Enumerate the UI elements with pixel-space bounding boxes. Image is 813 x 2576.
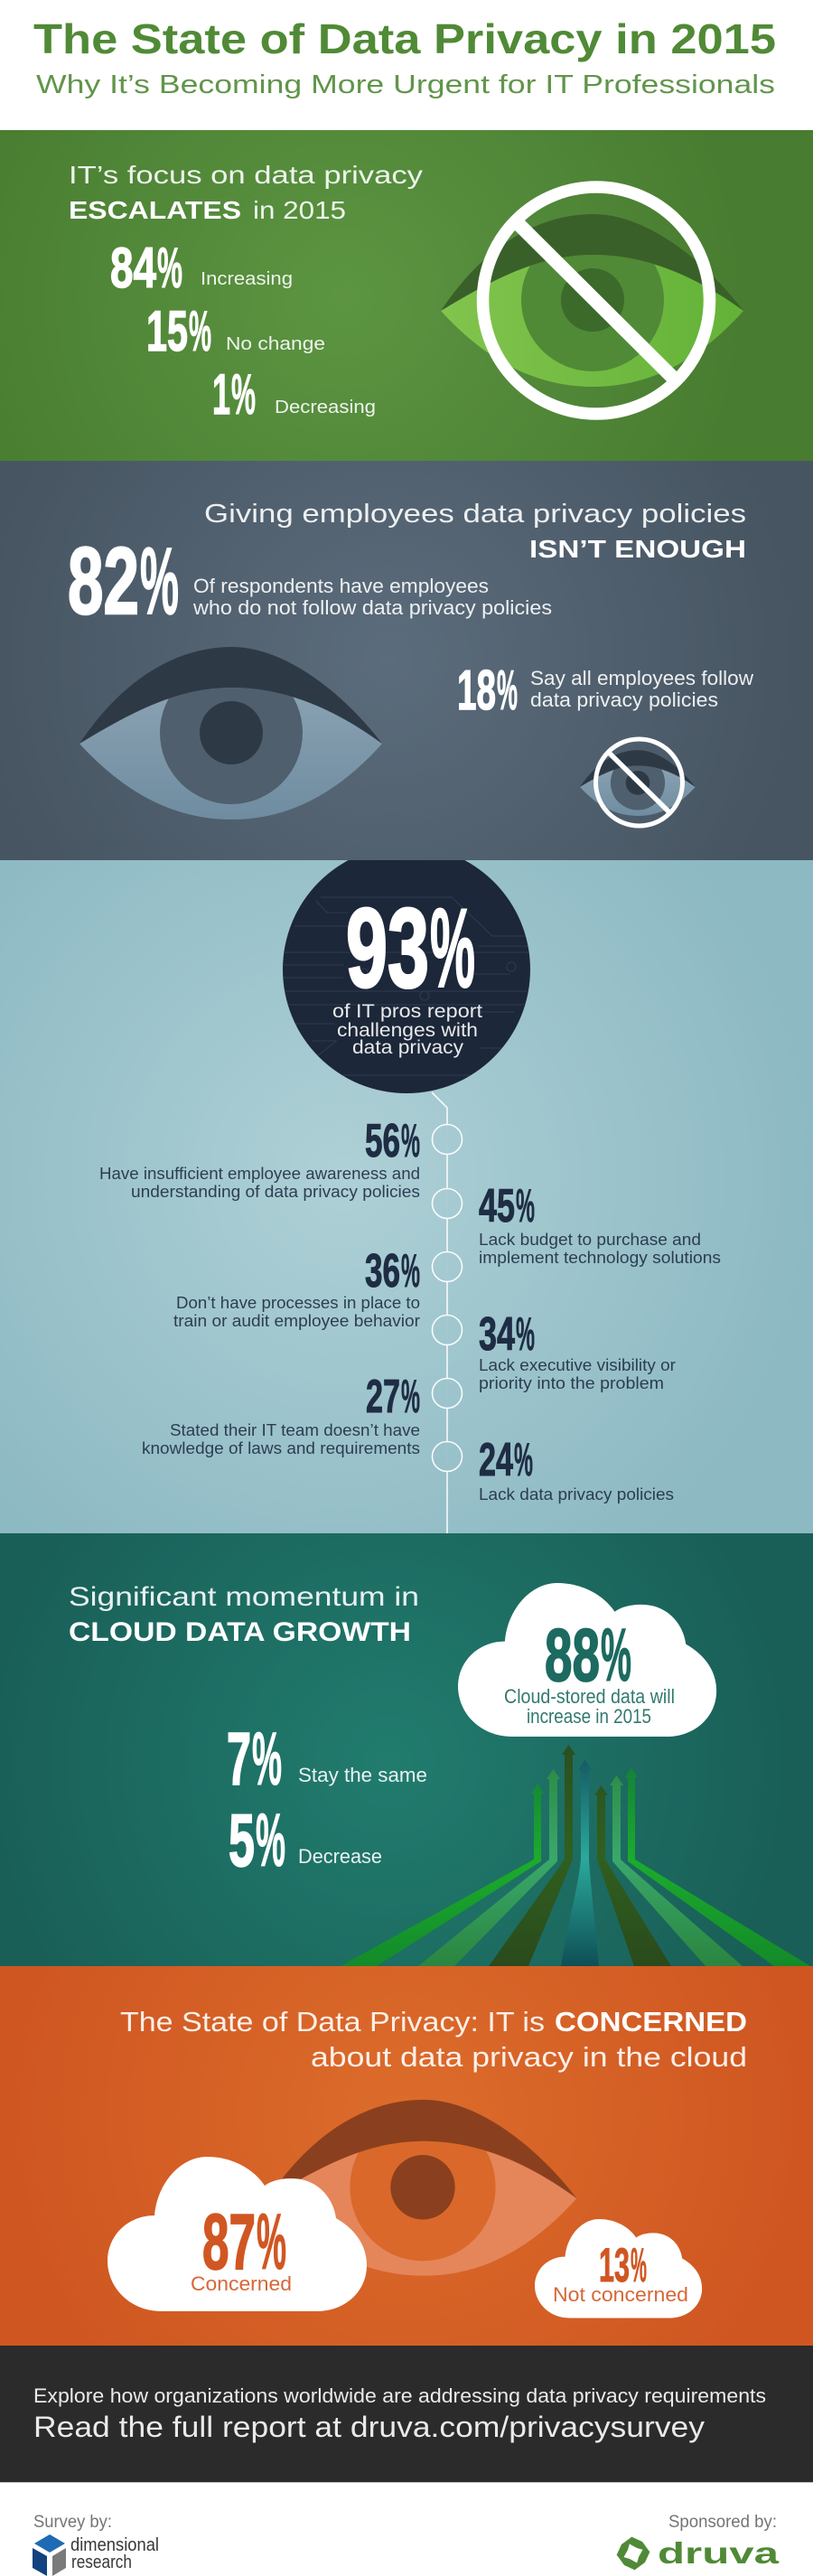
cloud: 88%: increase in 2015 [527, 1705, 651, 1728]
timeline markers [432, 1124, 463, 1471]
stat: 36%: train or audit employee behavior [173, 1312, 420, 1330]
stat: 45%: Lack budget to purchase and [479, 1231, 701, 1249]
cloud: 87% concerned: % [257, 2198, 286, 2286]
stat: 84% increasing: Increasing [201, 269, 293, 289]
icon: crossed-out green eye [441, 187, 743, 414]
stat: 1% decreasing: 1 [212, 363, 230, 426]
stat: 84% increasing: % [157, 237, 182, 300]
stat: 27%: Stated their IT team doesn’t have [170, 1421, 420, 1439]
panel: challenges with data privacy [0, 846, 813, 1534]
heading: about data privacy in the cloud [311, 2041, 747, 2073]
stat: 45%: 45 [479, 1180, 515, 1232]
stat: 82%: % [140, 529, 179, 634]
stat: 18%: Say all employees follow [530, 667, 753, 689]
stat: 5%: Decrease [298, 1845, 382, 1868]
dark circle: 93%: 93 [346, 886, 429, 1011]
stat: 34%: % [516, 1308, 535, 1361]
subtitle: Why It’s Becoming More Urgent for IT Professionals [36, 70, 775, 99]
stat: 45%: % [516, 1180, 535, 1232]
panel: call to action [0, 2346, 813, 2482]
stat: 56%: 56 [365, 1115, 400, 1167]
logo: dimensional research [33, 2534, 159, 2576]
stat: 18%: % [497, 660, 518, 722]
logo: dimensional research: research [71, 2553, 132, 2572]
logo: druva [616, 2536, 780, 2570]
cloud: 13% not concerned [535, 2219, 702, 2318]
footer [0, 2482, 813, 2576]
stat: 18% [457, 660, 753, 722]
stat: 18%: 18 [457, 660, 496, 722]
call to action text: Explore how organizations worldwide are addressing data privacy requirements [33, 2384, 766, 2407]
stat: 82%: Of respondents have employees [193, 575, 489, 597]
heading [69, 161, 423, 224]
stat: 84% increasing: 84 [110, 237, 156, 300]
stat: 27%: knowledge of laws and requirements [142, 1439, 420, 1457]
cloud: 13% not concerned: 13 [599, 2239, 630, 2292]
icon: orange eye [268, 2100, 576, 2276]
stat: 56% [99, 1115, 420, 1201]
cloud: 13% not concerned: Not concerned [553, 2283, 688, 2306]
cloud: 87% concerned [107, 2157, 367, 2311]
stat: 56%: Have insufficient employee awareness and [99, 1165, 420, 1183]
stat: 84% increasing [110, 237, 293, 300]
cloud: 88%: 88 [545, 1613, 600, 1697]
heading: The State of Data Privacy: IT is [120, 2006, 545, 2037]
stat: 27%: 27 [366, 1371, 400, 1423]
heading: ESCALATES [69, 196, 241, 224]
dark circle: 93%: data privacy [352, 1037, 464, 1058]
timeline line [432, 1092, 447, 1534]
stat: 7%: Stay the same [298, 1764, 427, 1786]
stat: 5%: % [256, 1798, 285, 1882]
cloud: 88% [458, 1583, 716, 1737]
heading: Significant momentum in [69, 1582, 419, 1612]
stat: 7%: % [252, 1717, 282, 1801]
panel: giving employees policies isn't enough [0, 461, 813, 860]
header [0, 0, 813, 130]
sponsor credit: Sponsored by: [668, 2513, 777, 2532]
stat: 24%: % [514, 1434, 533, 1486]
stat: 34% [479, 1308, 676, 1392]
stat: 5%: 5 [229, 1798, 255, 1882]
stat: 24%: Lack data privacy policies [479, 1485, 674, 1503]
stat: 18%: data privacy policies [530, 688, 718, 711]
dark circle: 93%: of IT pros report [332, 1001, 482, 1022]
logo: druva: druva [658, 2536, 780, 2570]
stat: 36%: 36 [365, 1245, 400, 1297]
stat: 27% [142, 1371, 420, 1457]
cloud: 87% concerned: 87 [202, 2198, 256, 2286]
stat: 82% [68, 529, 552, 634]
heading [204, 500, 746, 563]
stat: 15% no change: 15 [146, 300, 188, 363]
stat: 1% decreasing [212, 363, 376, 426]
stat: 15% no change: No change [226, 334, 325, 354]
survey credit: Survey by: [33, 2513, 112, 2532]
heading: in 2015 [253, 196, 346, 224]
panel: challenges with data privacy: % [401, 1115, 420, 1167]
stat: 36% [173, 1245, 420, 1330]
cloud: 88%: % [601, 1613, 631, 1697]
title: The State of Data Privacy in 2015 [33, 15, 776, 62]
dark circle: 93% [282, 846, 533, 1093]
heading: CONCERNED [555, 2006, 747, 2037]
cloud: 87% concerned: Concerned [191, 2272, 292, 2295]
heading: CLOUD DATA GROWTH [69, 1617, 411, 1647]
stat: 24%: 24 [479, 1434, 513, 1486]
stat: 34%: Lack executive visibility or [479, 1356, 676, 1374]
stat: 45% [479, 1180, 721, 1267]
heading: Giving employees data privacy policies [204, 500, 746, 529]
heading [69, 1582, 419, 1647]
dark circle: 93%: % [430, 886, 475, 1011]
stat: 82%: 82 [68, 529, 139, 634]
heading: ISN’T ENOUGH [529, 535, 746, 563]
stat: 24% [479, 1434, 674, 1503]
heading: IT’s focus on data privacy [69, 161, 423, 189]
dark circle: 93%: challenges with [337, 1020, 478, 1041]
stat: 45%: implement technology solutions [479, 1249, 721, 1267]
stat: 5% [229, 1798, 382, 1882]
call to action text: Read the full report at druva.com/privacysurvey [33, 2411, 705, 2443]
call to action text [33, 2384, 766, 2443]
stat: 15% no change [146, 300, 325, 363]
stat: 34%: 34 [479, 1308, 515, 1361]
stat: 7%: 7 [227, 1717, 251, 1801]
icon: grey eye [79, 647, 382, 820]
panel: cloud data growth [0, 1533, 813, 1966]
stat: 7% [227, 1717, 427, 1801]
panel: focus on data privacy escalates [0, 130, 813, 461]
cloud: 88%: Cloud-stored data will [504, 1685, 675, 1708]
stat: 82%: who do not follow data privacy policies [192, 596, 552, 619]
stat: 15% no change: % [189, 300, 211, 363]
cloud: 13% not concerned: % [631, 2239, 647, 2292]
stat: 56%: understanding of data privacy policies [131, 1183, 420, 1201]
logo: dimensional research: dimensional [70, 2535, 159, 2555]
stat: 36%: Don’t have processes in place to [176, 1294, 420, 1312]
panel: challenges with data privacy: % [401, 1371, 420, 1423]
arrows: growth [341, 1745, 810, 1966]
stat: 1% decreasing: % [231, 363, 256, 426]
panel: concerned about privacy in the cloud [0, 1966, 813, 2346]
stat: 1% decreasing: Decreasing [275, 398, 376, 417]
icon: small crossed-out eye [580, 739, 696, 826]
stat: 34%: priority into the problem [479, 1374, 664, 1392]
panel: challenges with data privacy: % [401, 1245, 420, 1297]
heading [120, 2006, 747, 2073]
